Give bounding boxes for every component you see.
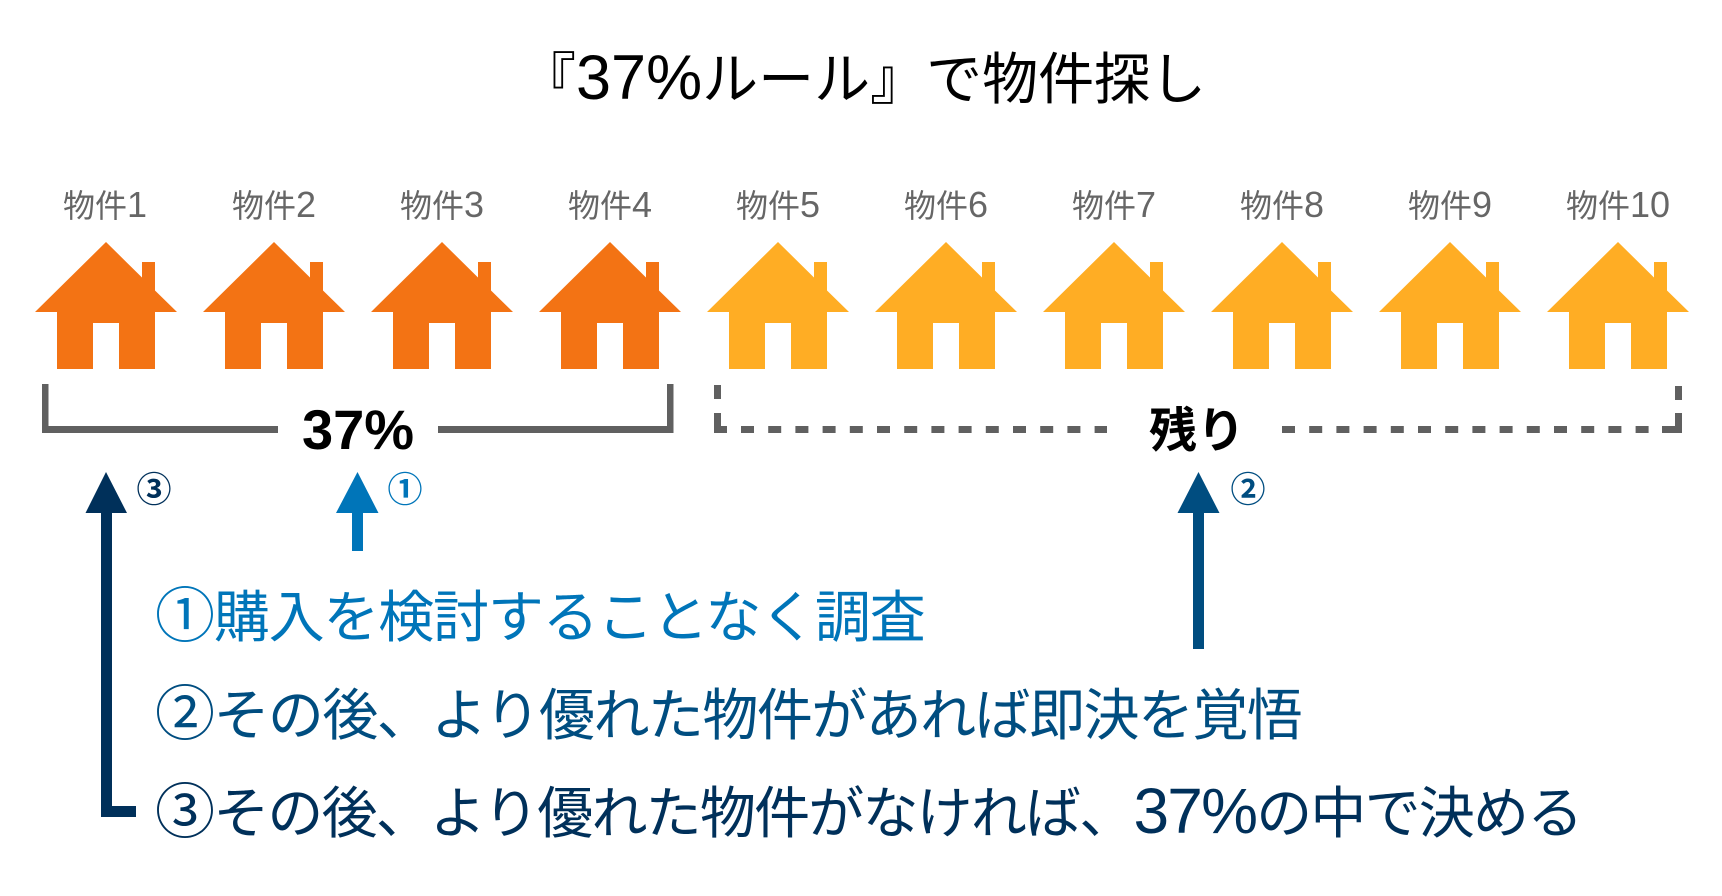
icon: house 10	[1547, 242, 1689, 369]
icon: house 4	[539, 242, 681, 369]
bracket: 37% group	[42, 384, 674, 433]
icon: house 2	[203, 242, 345, 369]
icon: house 5	[707, 242, 849, 369]
icon: house 6	[875, 242, 1017, 369]
label: 物件4: 物件4	[568, 184, 652, 225]
label: 物件5: 物件5	[736, 184, 820, 225]
marker ①: ①	[387, 471, 423, 510]
arrow 2	[1178, 472, 1220, 649]
step 2 text: ②その後、より優れた物件があれば即決を覚悟	[155, 681, 1301, 748]
marker ③: ③	[136, 471, 172, 510]
marker ②: ②	[1230, 471, 1266, 510]
arrow 1	[336, 472, 378, 551]
icon: house 7	[1043, 242, 1185, 369]
house row with labels	[35, 184, 1689, 369]
title: 『37%ルール』で物件探し	[520, 43, 1206, 113]
step 1 text: ①購入を検討することなく調査	[155, 583, 925, 650]
label: 物件1: 物件1	[63, 184, 147, 225]
label: 物件10: 物件10	[1566, 184, 1670, 225]
icon: house 1	[35, 242, 177, 369]
arrow 3: from step 3 up to 37%	[86, 472, 136, 817]
heading: 残り: 残り	[1149, 405, 1245, 458]
label: 物件9: 物件9	[1408, 184, 1492, 225]
label: 物件6: 物件6	[904, 184, 988, 225]
icon: house 3	[371, 242, 513, 369]
label: 物件3: 物件3	[400, 184, 484, 225]
label: 物件8: 物件8	[1240, 184, 1324, 225]
icon: house 8	[1211, 242, 1353, 369]
label: 物件2: 物件2	[232, 184, 316, 225]
bracket: remaining group (dashed)	[714, 385, 1682, 433]
step 3 text: ③その後、より優れた物件がなければ、37%の中で決める	[155, 775, 1581, 847]
heading: 37%: 37%	[302, 398, 414, 461]
label: 物件7: 物件7	[1072, 184, 1156, 225]
icon: house 9	[1379, 242, 1521, 369]
